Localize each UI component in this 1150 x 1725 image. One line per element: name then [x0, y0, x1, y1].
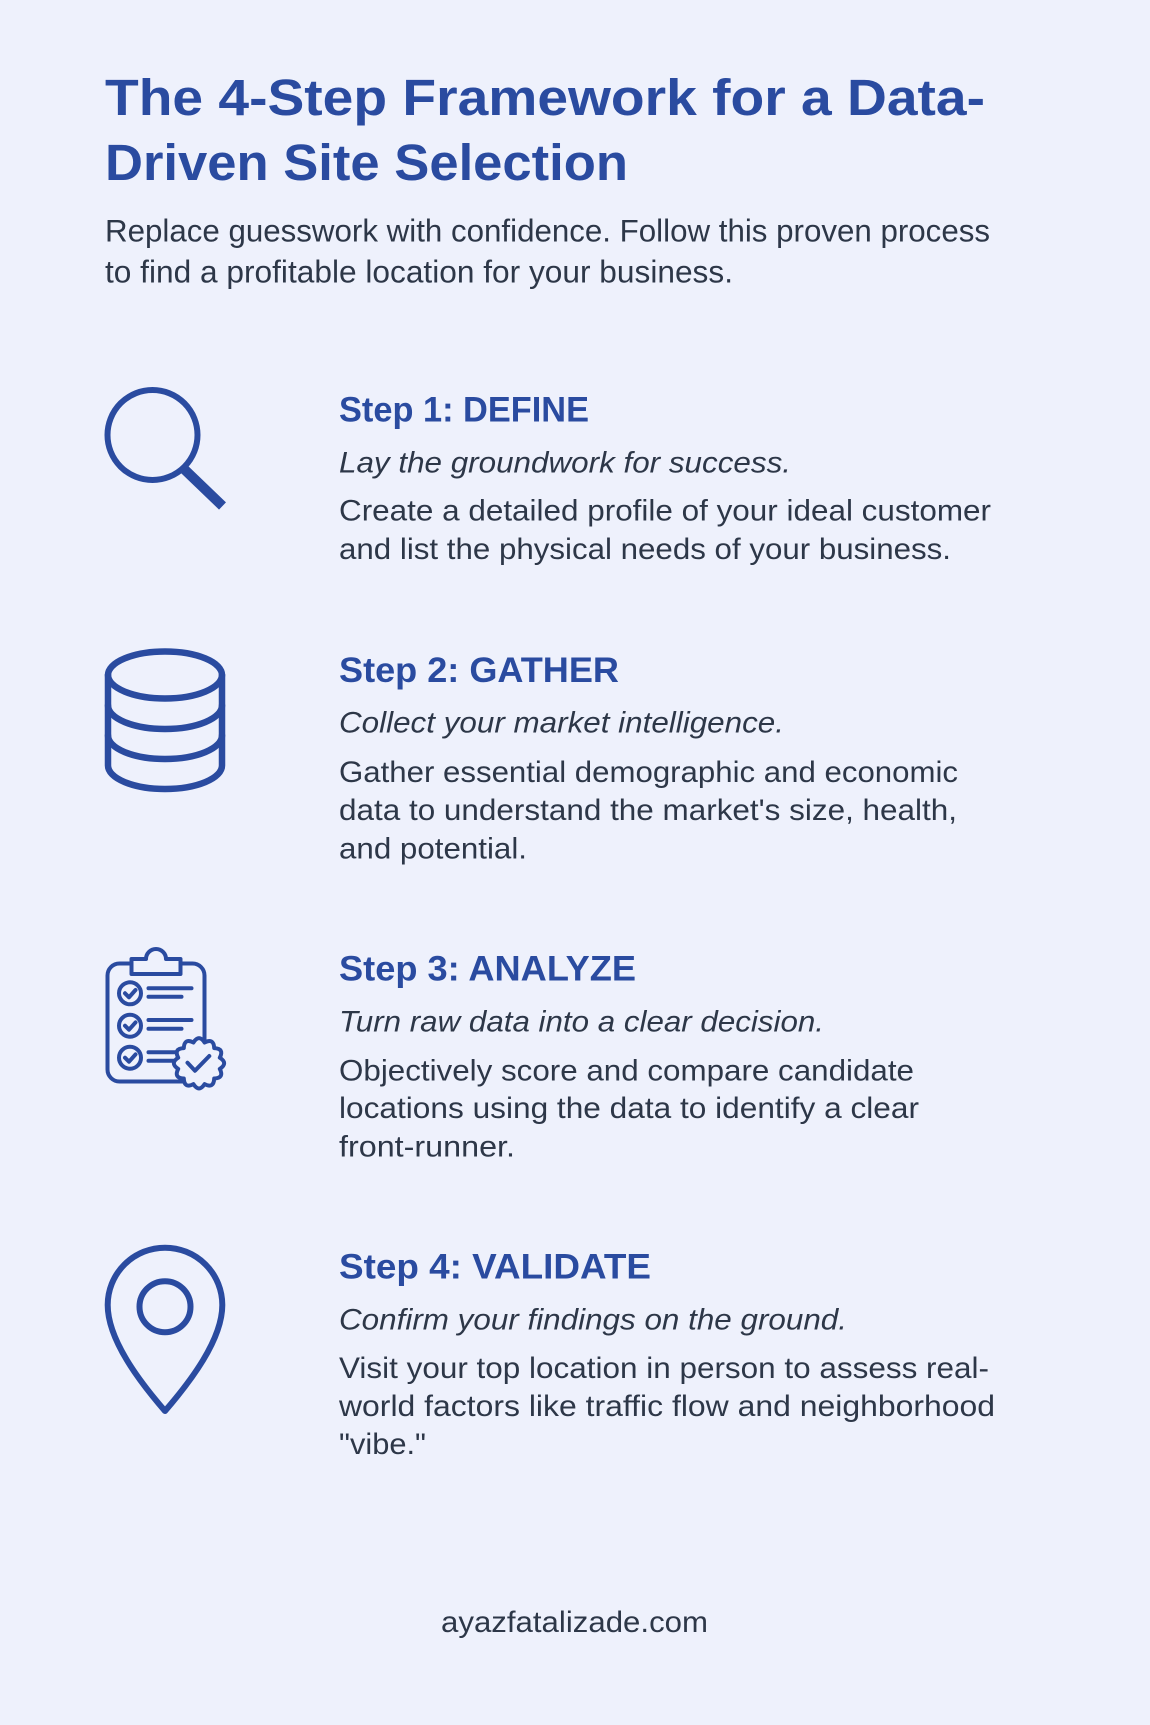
footer website: ayazfatalizade.com: [441, 1606, 708, 1639]
icon: map pin: [108, 1248, 222, 1411]
step 2 heading: Step 2: GATHER: [339, 650, 619, 690]
step 2 description: [339, 756, 958, 865]
step 3 description: front-runner.: [339, 1130, 515, 1163]
step 1 heading: Step 1: DEFINE: [339, 390, 589, 430]
step 2 description: data to understand the market's size, health,: [339, 794, 957, 827]
panel: step 1 define: [108, 390, 991, 566]
step 2 tagline: Collect your market intelligence.: [339, 707, 784, 740]
panel: step 4 validate: [108, 1247, 995, 1461]
step 2 description: and potential.: [339, 832, 527, 865]
step 3 heading: Step 3: ANALYZE: [339, 949, 636, 989]
step 3 description: [339, 1054, 919, 1163]
subtitle: [105, 212, 990, 290]
step 4 description: "vibe.": [339, 1428, 426, 1461]
step 4 description: Visit your top location in person to assess real-: [339, 1352, 989, 1385]
step 1 description: and list the physical needs of your business.: [339, 533, 951, 566]
step 1 description: [339, 494, 991, 566]
panel: step 2 gather: [108, 650, 958, 865]
step 4 description: world factors like traffic flow and neighborhood: [338, 1390, 995, 1423]
step 3 description: Objectively score and compare candidate: [339, 1054, 914, 1087]
step 3 tagline: Turn raw data into a clear decision.: [339, 1005, 824, 1038]
subtitle: Replace guesswork with confidence. Follow this proven process: [105, 212, 990, 248]
title: [105, 69, 985, 191]
icon: magnifying glass: [108, 390, 222, 506]
step 4 tagline: Confirm your findings on the ground.: [339, 1304, 847, 1337]
step 1 description: Create a detailed profile of your ideal customer: [339, 494, 991, 528]
step 4 description: [338, 1352, 995, 1461]
title: Driven Site Selection: [105, 134, 628, 191]
subtitle: to find a profitable location for your business.: [105, 254, 733, 290]
step 3 description: locations using the data to identify a clear: [339, 1092, 919, 1125]
title: The 4-Step Framework for a Data-: [105, 69, 985, 126]
step 2 description: Gather essential demographic and economic: [339, 756, 958, 789]
icon: database: [108, 652, 222, 789]
step 1 tagline: Lay the groundwork for success.: [339, 446, 791, 480]
panel: step 3 analyze: [108, 949, 919, 1163]
icon: clipboard checklist with badge: [108, 949, 224, 1088]
step 4 heading: Step 4: VALIDATE: [339, 1247, 651, 1287]
